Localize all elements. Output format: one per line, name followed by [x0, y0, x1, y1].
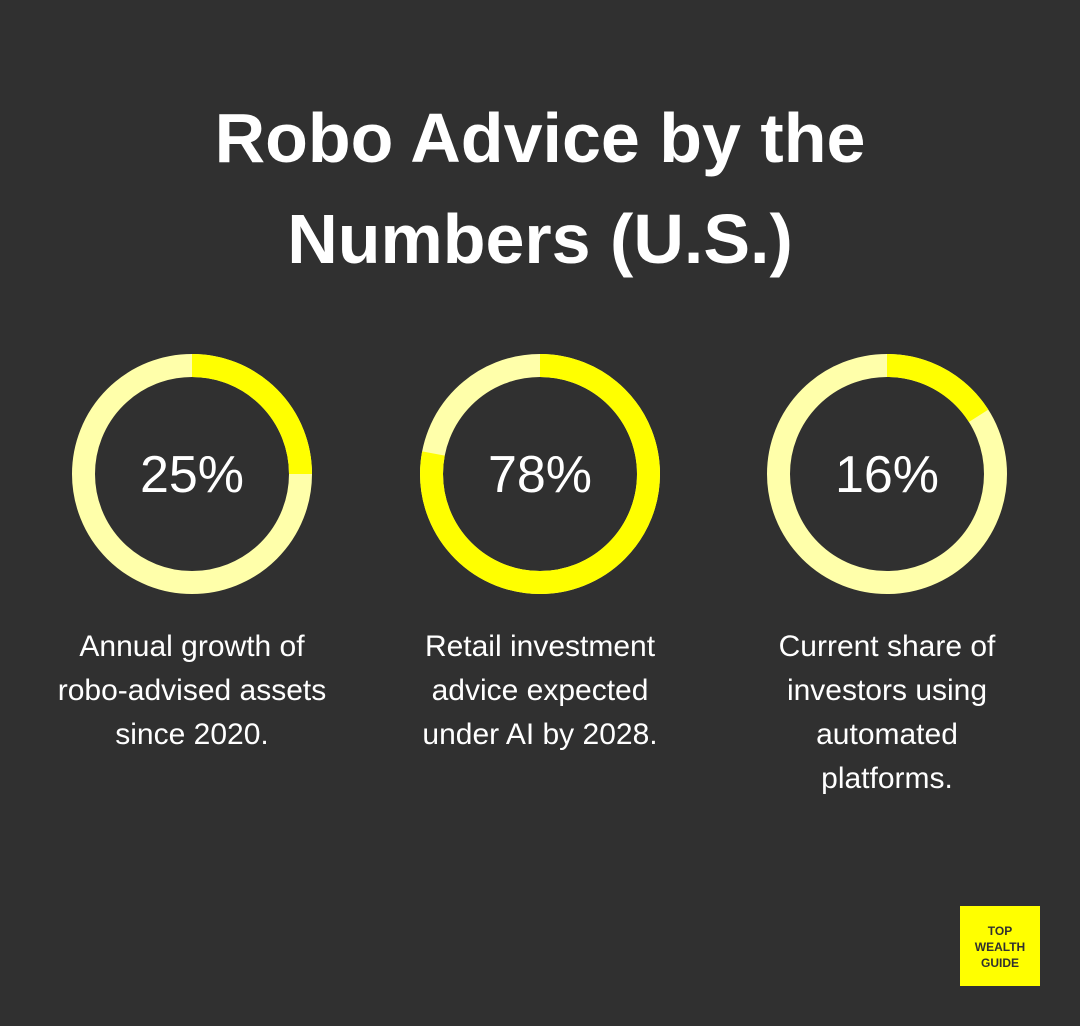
donut: 16%: 16% [835, 446, 939, 504]
description 2: under AI by 2028. [422, 718, 658, 751]
description 2 [422, 630, 658, 751]
description 3: platforms. [821, 762, 953, 795]
description 2: advice expected [432, 674, 648, 707]
donut: 25% [84, 366, 300, 582]
donut: 78%: 78% [488, 446, 592, 504]
title: Numbers (U.S.) [287, 200, 793, 278]
logo: TOP [988, 924, 1012, 938]
description 2: Retail investment [425, 630, 655, 663]
description 3: automated [816, 718, 958, 751]
donut: 78% [432, 366, 648, 582]
logo [960, 906, 1040, 986]
description 1: since 2020. [115, 718, 269, 751]
description 3: Current share of [779, 630, 995, 663]
description 1: robo-advised assets [58, 674, 326, 707]
logo: WEALTH [975, 940, 1025, 954]
description 3 [779, 630, 996, 795]
title [215, 99, 865, 278]
description 1 [58, 630, 326, 751]
description 1: Annual growth of [79, 630, 305, 663]
description 3: investors using [787, 674, 987, 707]
donut: 25%: 25% [140, 446, 244, 504]
donut: 16% [778, 366, 996, 582]
logo: GUIDE [981, 956, 1019, 970]
title: Robo Advice by the [215, 99, 865, 177]
